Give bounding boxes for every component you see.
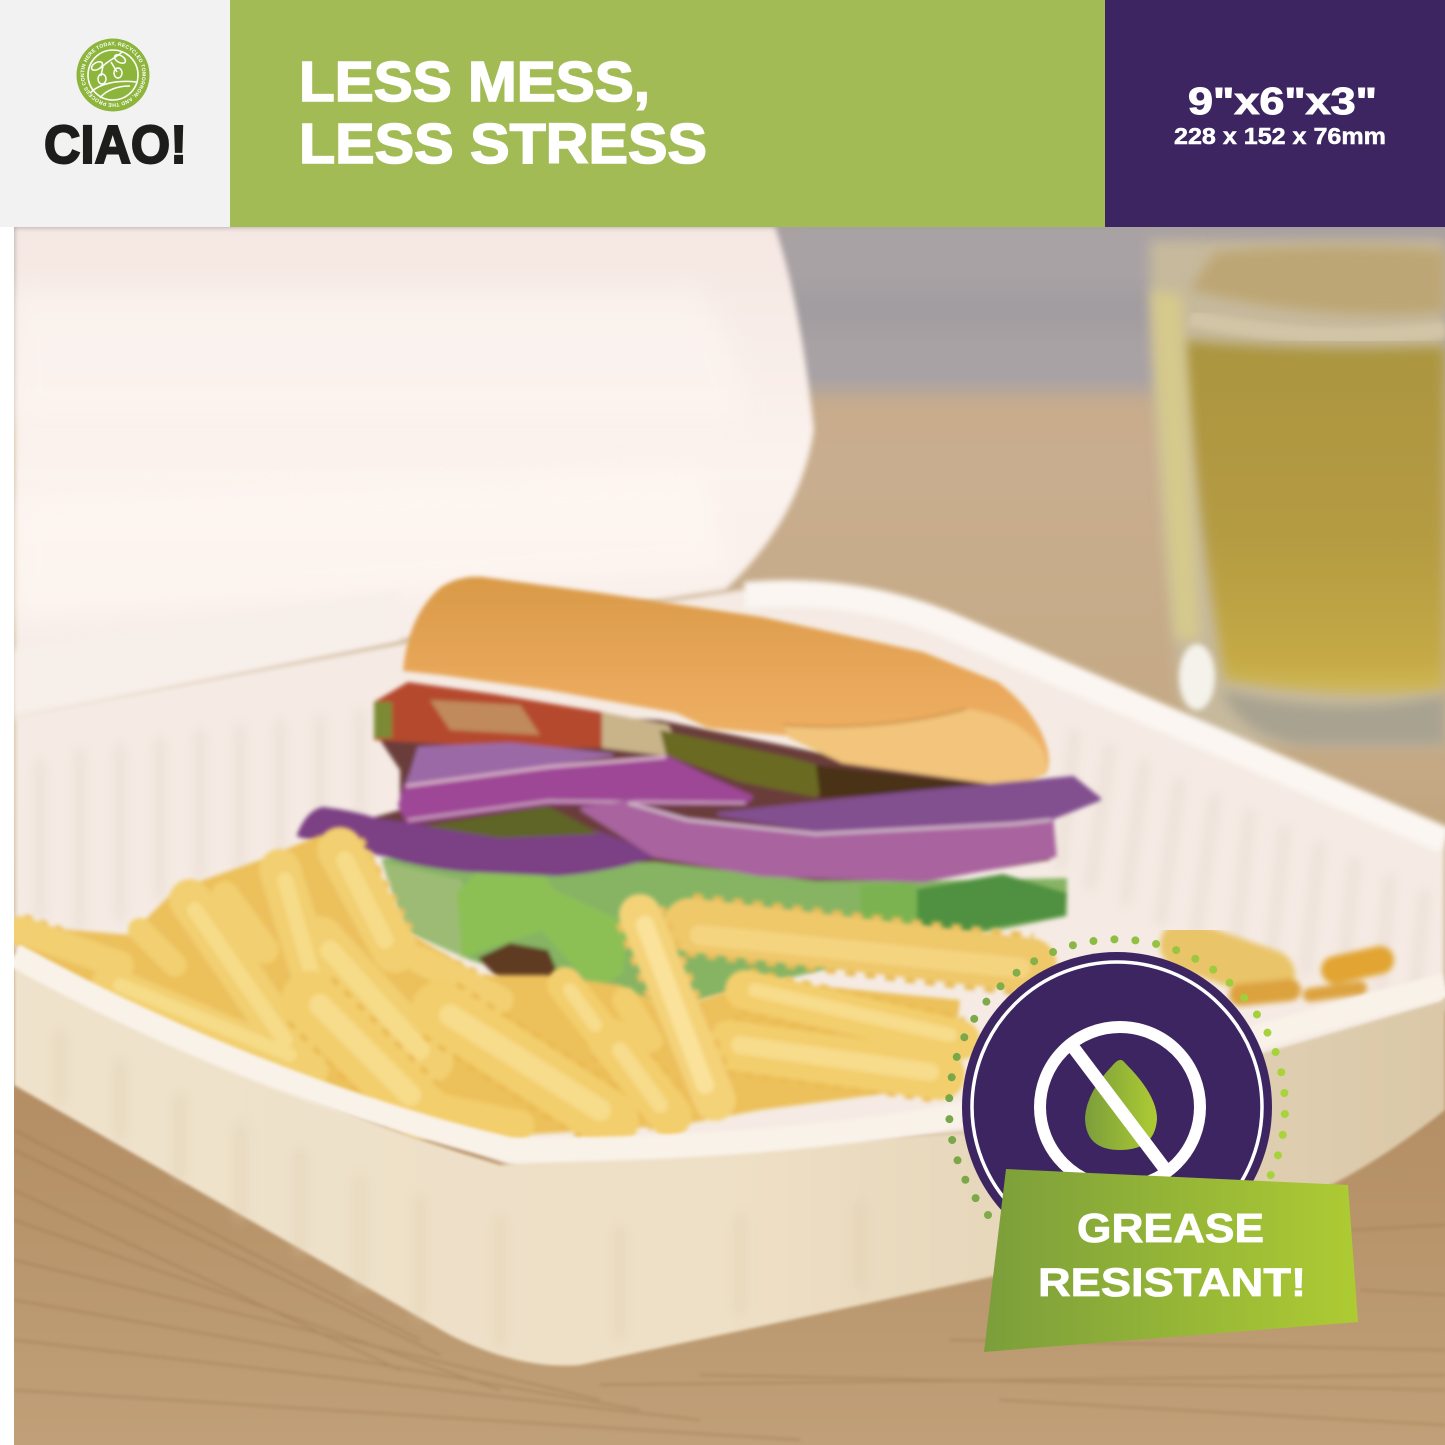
header: logo panel [0, 0, 230, 227]
green label [984, 1169, 1358, 1352]
fries base mass [14, 835, 960, 1135]
header: dimensions panel [1105, 0, 1445, 227]
dimensions text: 9"x6"x3" [1188, 81, 1377, 123]
container front wall and rim [14, 955, 1445, 1366]
dotted ring [949, 939, 1285, 1215]
container lid [14, 227, 814, 720]
purple circle [962, 952, 1272, 1262]
middle fries [310, 990, 960, 1120]
headline: LESS STRESS [299, 112, 707, 176]
headline: LESS MESS, [299, 50, 650, 114]
label text: GREASE [1077, 1205, 1264, 1251]
upper filling: tomato, relish and pickle [374, 682, 992, 838]
glass of beer [1150, 240, 1445, 745]
front fries [690, 925, 1030, 965]
icon: grease drop crossed out [1040, 1027, 1200, 1187]
headline [299, 50, 707, 176]
crinkle fries [14, 835, 1030, 1135]
header: headline panel [230, 0, 1105, 227]
container interior [14, 588, 1445, 1170]
top bun [403, 577, 1049, 784]
dark filling behind the layers [373, 716, 1052, 884]
lower onion slices [583, 778, 1099, 880]
blurred fries on the right [1185, 945, 1380, 995]
patty [477, 940, 558, 978]
logo wordmark: CIAO! [44, 115, 187, 175]
label text: RESISTANT! [1038, 1261, 1306, 1305]
sandwich [299, 577, 1099, 1008]
lettuce [382, 855, 1067, 1000]
grease resistant badge [949, 939, 1358, 1352]
onion slice: lower left [299, 809, 655, 874]
dimensions text: 228 x 152 x 76mm [1174, 123, 1386, 149]
dimensions text [1174, 81, 1386, 149]
label text [1038, 1205, 1306, 1305]
logo seal: olive branch emblem [76, 38, 150, 112]
back fries [22, 835, 487, 976]
upper onion slices [400, 744, 751, 822]
